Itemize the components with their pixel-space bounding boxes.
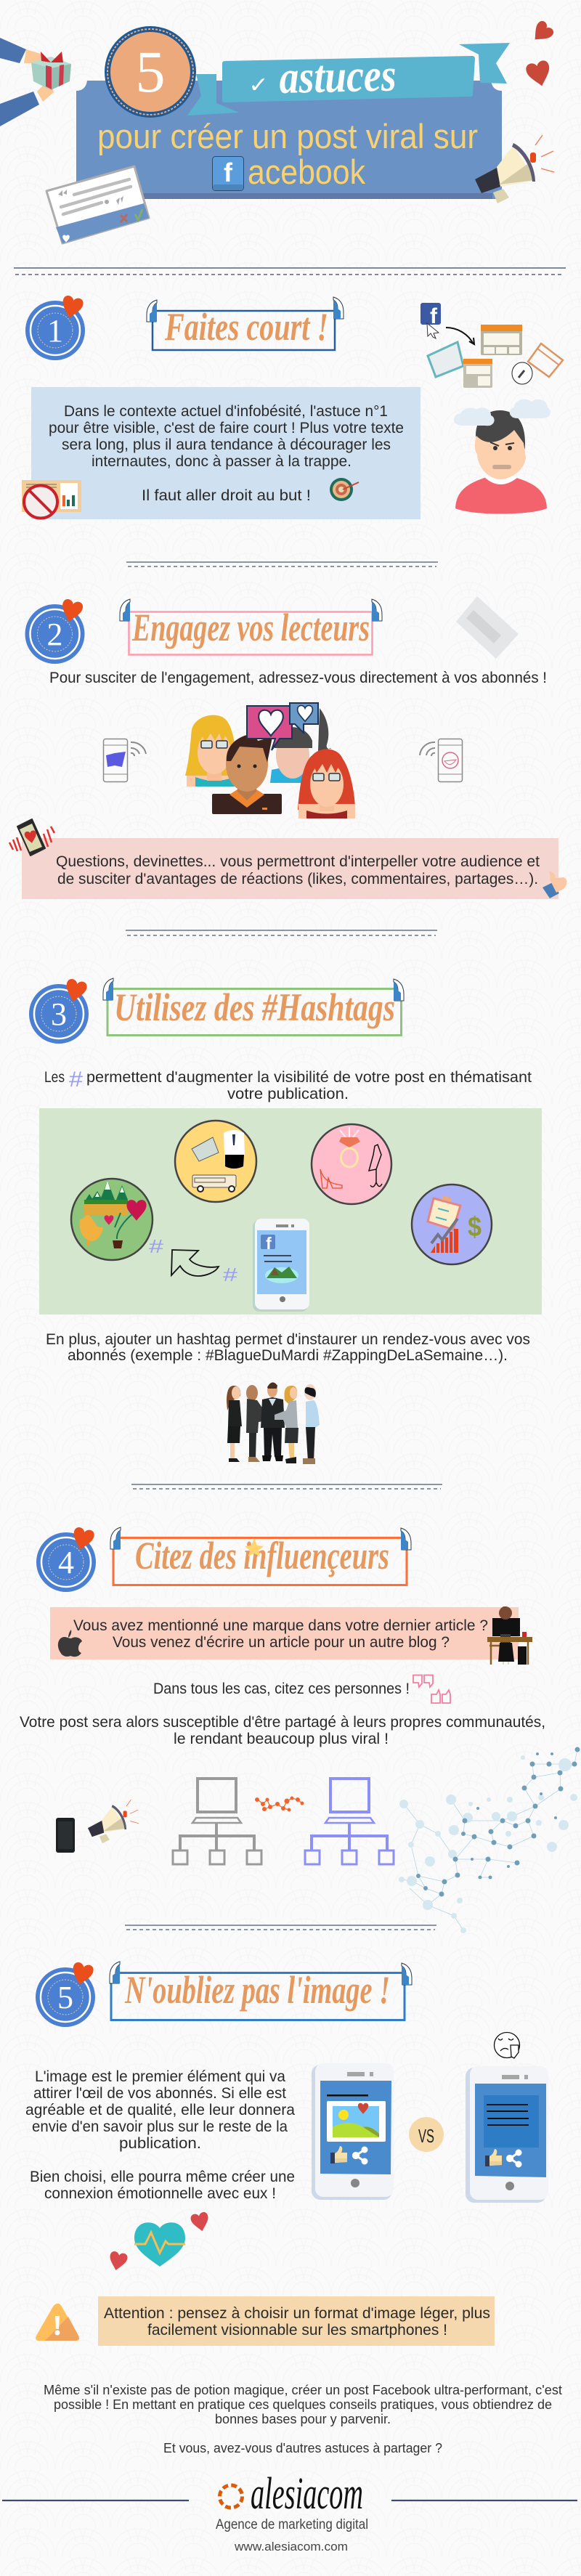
illustration: plexus network [399,1747,580,1933]
number badge 5 [36,1962,95,2027]
diagram: purple network [305,1779,394,1864]
section 5: image [25,1962,562,2455]
check and astuces [248,49,397,103]
number badge 1 [25,295,85,360]
icon: thumb up [543,871,566,898]
panel: intro text: sera long, plus il aura tendance à décourager les [62,436,391,453]
header [0,19,556,243]
divider [126,562,438,566]
icon: confused man [454,399,550,514]
text: votre post: le rendant beaucoup plus viral ! [174,1730,389,1747]
icon: person at desk [487,1606,532,1665]
panel: mention [50,1607,519,1659]
icon: phone with image [312,2063,394,2200]
icon: web windows [420,303,563,388]
text: hashtag intro [44,1068,532,1102]
icon: vibrating phone [9,819,54,856]
number circle [105,26,196,118]
icon: hearts [525,19,556,89]
tagline: Agence de marketing digital [216,2517,368,2532]
number badge 4 [36,1527,96,1592]
person: red-haired woman [298,749,355,818]
number badge 3: 3 [51,996,67,1032]
panel: questions [22,838,558,899]
text: hashtag rendez-vous: abonnés (exemple : #BlagueDuMardi #ZappingDeLaSemaine…). [68,1346,508,1364]
divider [14,268,566,275]
icon: phone with text only [466,2066,548,2203]
text: hashtag intro: # [69,1068,83,1092]
section 4: influenceurs [20,1527,580,1933]
title: engagez [120,599,382,655]
callout: attention: Attention : pensez à choisir un format d'image léger, plus [104,2304,490,2322]
icon: small megaphone [88,1800,139,1843]
hashtag marks: # [149,1235,164,1257]
versus badge [409,2117,444,2152]
number badge 5: 5 [57,1980,73,2015]
circle: fashion [312,1124,391,1204]
number badge 1: 1 [47,313,63,349]
figure: man in blue shirt [303,1384,320,1464]
text: image explanation: envie d'en savoir plus sur le reste de la [32,2118,288,2135]
section 2: engagez vos lecteurs [9,596,566,899]
hashtag marks: # [223,1264,238,1285]
text: conclusion: Et vous, avez-vous d'autres astuces à partager ? [163,2441,442,2455]
title: hashtags [103,978,404,1036]
text: hashtag intro: Les [44,1068,65,1086]
title: influenceurs [110,1527,411,1585]
panel: intro text [31,387,420,519]
text: image explanation: connexion émotionnelle avec eux ! [44,2185,276,2202]
text: hashtag rendez-vous: En plus, ajouter un hashtag permet d'instaurer un rendez-vous avec vos [46,1330,530,1348]
number badge 4: 4 [58,1545,74,1580]
section 3: hashtags [29,978,542,1315]
icon: megaphone [475,135,554,203]
icon: quote card [46,166,149,243]
callout: attention: facilement visionnable sur les smartphones ! [147,2321,447,2339]
section 1: faites court [22,295,563,519]
text: image explanation [25,2068,295,2202]
person: back woman [270,708,331,783]
icon: faded laptop [456,596,519,659]
illustration: business team [227,1382,320,1464]
title: image [110,1962,412,2020]
number badge 2 [25,598,84,664]
number circle: 5 [135,38,166,105]
icon: black phone [56,1818,75,1853]
check and astuces: ✓ [248,73,269,98]
hashtag marks [149,1235,238,1285]
figure: bald man [246,1385,268,1462]
icon: target [330,478,359,501]
panel: questions: de susciter d'avantages de réactions (likes, commentaires, partages…). [57,870,538,887]
divider [126,930,437,935]
title: faites court: Faites court ! [164,305,328,349]
arrow: phone to circles [171,1250,219,1276]
icon: web windows: f [430,304,438,328]
icon: facebook phone [253,1219,309,1312]
versus badge: VS [418,2125,434,2147]
icon: quote marks [413,1675,450,1703]
check and astuces: astuces [279,49,397,103]
icon: no long content [22,480,81,519]
text: votre post: Votre post sera alors susceptible d'être partagé à leurs propres communautés, [20,1713,545,1731]
text: citez ces personnes: Dans tous les cas, citez ces personnes ! [153,1680,410,1697]
callout: attention [98,2296,495,2346]
panel: mention: Vous venez d'écrire un article pour un autre blog ? [113,1633,450,1651]
figure: blond woman [275,1386,298,1463]
panel: intro text: internautes, donc à passer à la trappe. [92,452,352,470]
icon: left phone [103,739,146,781]
icon: apple logo [58,1630,82,1657]
person: man [212,734,282,814]
text: image explanation: Bien choisi, elle pourra même créer une [30,2168,295,2185]
intro text: Pour susciter de l'engagement, adressez-vous directement à vos abonnés ! [49,669,547,686]
person: blond woman [185,715,237,787]
text: image explanation: attirer l'œil de vos abonnés. Si elle est [33,2084,286,2102]
title: image: N'oubliez pas l'image ! [124,1968,390,2012]
text: conclusion: possible ! En mettant en pratique ces quelques conseils pratiques, vous obtiendrez de [54,2397,552,2412]
icon: orange molecule [256,1797,304,1811]
text: image explanation: L'image est le premier élément qui va [35,2068,285,2085]
divider [131,1484,442,1489]
title: influenceurs: Citez des influençeurs [135,1534,389,1577]
panel: intro text: Dans le contexte actuel d'infobésité, l'astuce n°1 [64,402,388,420]
speech bubble: blue [290,703,318,733]
panel: mention: Vous avez mentionné une marque dans votre dernier article ? [73,1617,488,1634]
title: faites court [147,297,344,350]
icon: small red hearts [107,2211,211,2272]
text: image explanation: agréable et de qualité, elle leur donnera [25,2101,295,2118]
number badge 2: 2 [46,617,62,652]
logo wordmark: alesiacom [251,2469,363,2519]
facebook icon: f [224,158,233,187]
ribbon [187,43,510,115]
icon: facebook phone: f [266,1234,272,1253]
footer [2,2469,577,2553]
circle: school [175,1121,256,1202]
circle: nature [71,1179,153,1260]
icon: heart pulse [134,2222,185,2267]
text: conclusion: bonnes bases pour y parvenir. [215,2412,391,2426]
number badge 3 [29,978,89,1044]
text: votre post [20,1713,545,1747]
title: engagez: Engagez vos lecteurs [131,606,370,649]
text: conclusion: Même s'il n'existe pas de potion magique, créer un post Facebook ultra-performant, c'est [44,2383,562,2397]
figure: center man [261,1382,285,1461]
panel: questions: Questions, devinettes... vous permettront d'interpeller votre audience et [56,853,540,870]
header panel [76,81,502,199]
footer rules [2,2500,577,2501]
circle: business: $ [468,1212,482,1243]
icon: sad face [494,2032,520,2058]
text: hashtag intro: votre publication. [227,1085,349,1102]
headline word: acebook [248,153,365,191]
diagram: grey network [173,1779,261,1864]
figure: woman brown hair [227,1386,242,1462]
headline: pour créer un post viral sur [97,117,478,155]
icon: warning triangle [36,2304,79,2341]
title: hashtags: Utilisez des #Hashtags [114,986,395,1029]
icon: hands with gift [0,38,71,126]
website: www.alesiacom.com [234,2540,348,2553]
panel: hashtag themes [39,1108,542,1315]
facebook icon [212,157,244,190]
illustration: four people with speech bubbles [185,703,355,818]
panel: intro text: pour être visible, c'est de faire court ! Plus votre texte [49,419,404,436]
icon: right phone [420,739,462,781]
text: image explanation: publication. [119,2134,201,2152]
circle: business [412,1185,492,1264]
text: conclusion [44,2383,562,2455]
speech bubble: pink [247,706,292,750]
panel: intro text: Il faut aller droit au but ! [142,487,311,504]
logo ring [219,2485,243,2508]
text: hashtag intro: permettent d'augmenter la visibilité de votre post en thématisant [86,1068,532,1086]
text: hashtag rendez-vous [46,1330,530,1364]
divider [125,1925,436,1930]
